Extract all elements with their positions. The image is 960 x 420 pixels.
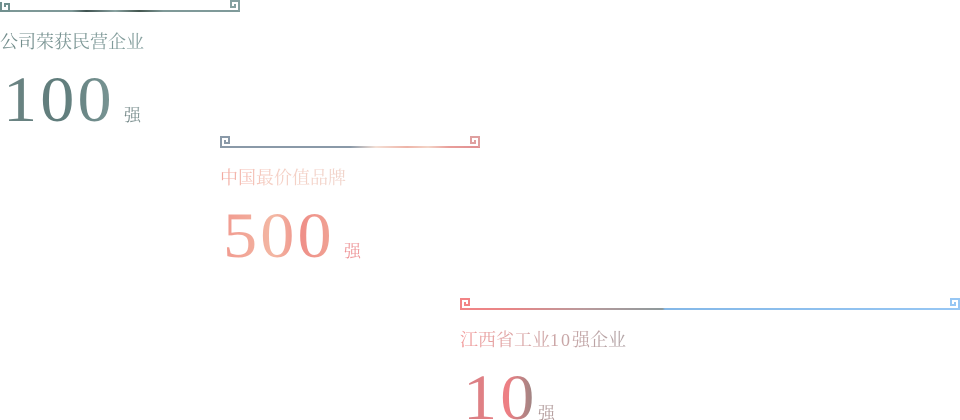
frame line with corner ornaments: [0, 0, 240, 12]
frame line with corner ornaments: [220, 136, 480, 148]
number: 500: [223, 200, 335, 272]
panel: Jiangxi top 10 industrial enterprises: [460, 298, 960, 420]
panel: 500 most valuable brands: [220, 136, 480, 272]
heading: 公司荣获民营企业: [0, 32, 144, 52]
frame line with corner ornaments: [460, 298, 960, 310]
number: 100: [3, 64, 115, 136]
unit: 强: [344, 242, 361, 261]
heading: 中国最价值品牌: [220, 168, 346, 188]
panel: 100 strong private enterprises: [0, 0, 240, 136]
heading: 江西省工业10强企业: [460, 330, 626, 350]
unit: 强: [124, 106, 141, 125]
